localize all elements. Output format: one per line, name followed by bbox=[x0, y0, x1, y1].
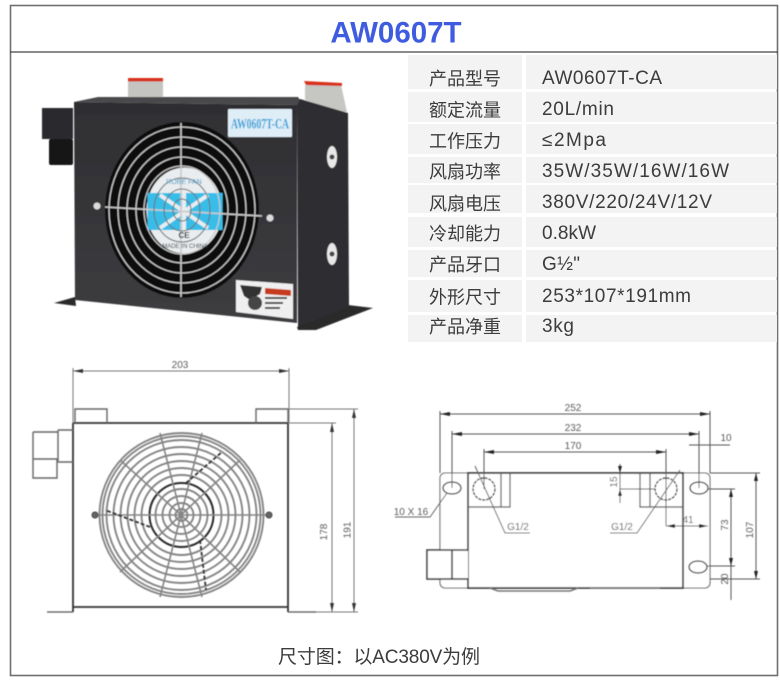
fan guard drawing bbox=[92, 433, 272, 597]
row: weight: 产品净重 bbox=[429, 317, 501, 337]
row: model bbox=[408, 55, 777, 89]
caption: 尺寸图：以AC380V为例 bbox=[278, 646, 480, 668]
row: cooling capacity: 0.8kW bbox=[542, 223, 596, 244]
icon: feet bbox=[54, 297, 373, 330]
icon: fan with wire guard: CE bbox=[178, 231, 190, 240]
row: dimensions: 外形尺寸 bbox=[429, 288, 501, 308]
dimension 178 bbox=[288, 423, 358, 612]
row: model: 产品型号 bbox=[429, 69, 501, 89]
dimension 170: 170 bbox=[565, 441, 582, 452]
icon: electrical connector bbox=[42, 108, 73, 165]
row: model: AW0607T-CA bbox=[542, 68, 662, 89]
row: weight: 3kg bbox=[542, 316, 574, 337]
callout: left thread bbox=[475, 466, 530, 533]
callout: slot size: 10 X 16 bbox=[394, 507, 429, 518]
row: fan power bbox=[408, 157, 777, 183]
row: flow bbox=[408, 92, 777, 122]
dimension 73 bbox=[707, 489, 735, 600]
dimension 20: 20 bbox=[720, 573, 731, 585]
dimension 203 bbox=[73, 360, 289, 423]
icon: mounting screws bbox=[94, 202, 274, 222]
row: cooling capacity bbox=[408, 217, 777, 247]
row: pressure bbox=[408, 124, 777, 154]
row: dimensions: 253*107*191mm bbox=[542, 286, 691, 307]
port circles bbox=[473, 478, 677, 500]
row: thread bbox=[408, 250, 777, 277]
dimension 191 bbox=[288, 409, 358, 612]
icon: warning label bbox=[236, 280, 293, 319]
row: fan voltage: 380V/220/24V/12V bbox=[542, 192, 712, 213]
dimension 10 bbox=[689, 433, 732, 445]
dimension 15: 15 bbox=[609, 476, 620, 488]
row: fan power: 风扇功率 bbox=[429, 162, 501, 182]
dimension 232 bbox=[452, 423, 699, 488]
icon: fan with wire guard bbox=[105, 122, 262, 298]
dimension 73: 73 bbox=[720, 519, 731, 531]
dimension 41: 41 bbox=[682, 515, 694, 526]
row: pressure: 工作压力 bbox=[429, 132, 501, 152]
dimension 107: 107 bbox=[745, 521, 756, 538]
icon: top and side of housing bbox=[74, 97, 349, 327]
dimension 252 bbox=[440, 403, 710, 473]
spec table bbox=[408, 55, 777, 342]
callout: right thread: G1/2 bbox=[611, 522, 633, 533]
row: thread: G½" bbox=[542, 254, 580, 275]
row: fan voltage: 风扇电压 bbox=[429, 194, 501, 214]
icon: model label bbox=[228, 109, 292, 137]
dimension 203: 203 bbox=[172, 360, 189, 371]
connector bbox=[427, 550, 468, 579]
row: flow: 额定流量 bbox=[429, 100, 501, 120]
front dimension drawing bbox=[33, 360, 358, 612]
icon: fan with wire guard: MADE IN CHINA bbox=[162, 244, 208, 250]
callout: left thread: G1/2 bbox=[507, 522, 529, 533]
row: weight bbox=[408, 315, 777, 342]
mounting slots bbox=[443, 482, 708, 573]
dimension 170 bbox=[484, 441, 666, 526]
row: fan voltage bbox=[408, 185, 777, 214]
row: cooling capacity: 冷却能力 bbox=[429, 224, 501, 244]
icon: right oil port bbox=[304, 81, 347, 112]
icon: fan with wire guard: ROBE FAN bbox=[166, 179, 202, 186]
dimension 178: 178 bbox=[319, 523, 330, 540]
dimension 252: 252 bbox=[565, 403, 582, 414]
dimension 232: 232 bbox=[565, 423, 582, 434]
row: pressure: ≤2Mpa bbox=[542, 130, 606, 151]
icon: front face of housing bbox=[74, 102, 297, 323]
callout: right thread bbox=[610, 470, 680, 533]
product photo: cooler bbox=[42, 78, 373, 330]
base plate and body bbox=[440, 473, 710, 591]
icon: left oil port bbox=[128, 78, 163, 100]
top dimension drawing bbox=[394, 403, 760, 600]
row: flow: 20L/min bbox=[542, 99, 614, 120]
row: thread: 产品牙口 bbox=[429, 255, 501, 275]
row: fan power: 35W/35W/16W/16W bbox=[542, 161, 729, 182]
title: AW0607T bbox=[330, 16, 462, 50]
housing outline bbox=[33, 409, 316, 612]
dimension 41 bbox=[666, 515, 708, 528]
dimension 15 bbox=[609, 464, 655, 503]
dimension 191: 191 bbox=[342, 521, 354, 538]
row: dimensions bbox=[408, 280, 777, 312]
callout: slot size bbox=[394, 493, 447, 518]
dimension 10: 10 bbox=[720, 433, 732, 444]
icon: model label: AW0607T-CA bbox=[231, 116, 289, 132]
dimension 107 bbox=[710, 473, 760, 579]
